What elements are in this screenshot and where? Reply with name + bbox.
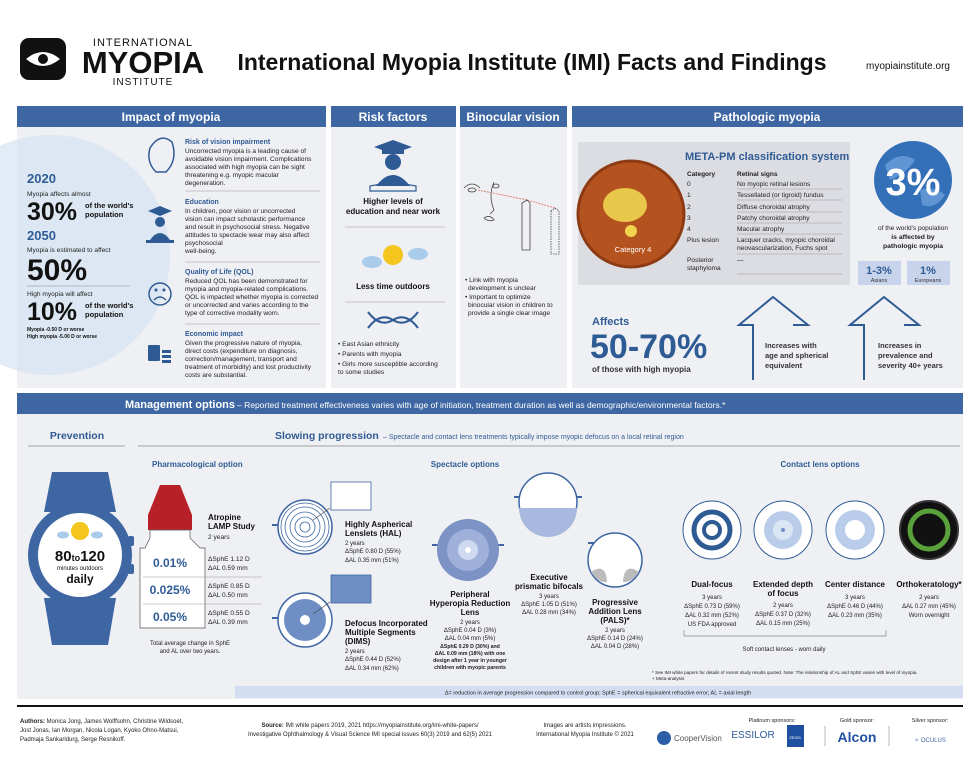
pharmacological heading: Pharmacological option [152,460,243,469]
atropine text [150,513,256,655]
lens: executive bifocals: ΔAL 0.28 mm (34%) [522,610,576,616]
footnote: * See IMI white papers for details of recent study results quoted. Note: The relationship of AL and SphE varies with level of myopia. [652,670,918,675]
META-PM table: META-PM classification system [685,151,849,163]
stat boxes: 1% [920,265,936,277]
footer: source [248,723,493,738]
item: quality of life: type of corrective modality worn. [185,310,280,317]
statistics: Myopia affects almost [27,191,91,198]
lens: HAL: ΔSphE 0.80 D (55%) [345,549,401,555]
icon: head [149,138,174,172]
logo: INTERNATIONAL [93,37,193,49]
management options bar [17,393,963,414]
footer: images note: International Myopia Institute © 2021 [536,731,635,738]
icon: graduate reading [370,140,416,191]
atropine text: Atropine [208,513,241,522]
lens: executive bifocals: prismatic bifocals [515,582,584,591]
statistics: 30% [27,198,77,226]
statistics: of the world's [85,201,133,210]
META-PM table: Tessellated (or tigroid) fundus [737,192,824,199]
binocular notes: provide a single clear image [468,310,550,317]
atropine text: 2 years [208,534,230,541]
META-PM table: — [737,257,744,264]
sponsors: CooperVision [674,734,722,743]
contact lens: orthokeratology: ΔAL 0.27 mm (45%) [902,604,956,610]
icon: atropine bottle [140,485,262,628]
globe 3%: of the world's population [878,225,948,232]
panel: risk factors: education and near work [346,207,441,216]
arrow: increases with age [739,297,828,380]
globe 3%: is affected by [891,234,935,241]
item: risk of vision impairment: Risk of vision impairment [185,139,271,146]
prevention heading: Prevention [50,430,104,442]
icon: calculator and coins [148,345,171,363]
arrow: increases with age: Increases with [765,341,817,350]
atropine text: LAMP Study [208,522,256,531]
management options bar: – Reported treatment effectiveness varies with age of initiation, treatment duration as well as demographic/environmental factors.* [237,400,726,410]
footer: images note: Images are artists impressions. [543,723,627,729]
footer: images note [536,723,635,738]
lens: PALS: (PALS)* [600,616,630,625]
sponsors: Platinum sponsors: [749,718,796,724]
atropine text: ΔAL 0.50 mm [208,592,248,599]
icon: watch: daily [66,572,94,586]
panel: impact of myopia [0,106,326,388]
atropine text: and AL over two years. [160,649,221,655]
fundus image: Category 4 [615,245,651,254]
icon: atropine bottle: 0.05% [153,610,187,624]
statistics: Myopia -0.50 D or worse [27,327,84,333]
META-PM table: 0 [687,181,691,188]
META-PM table: 1 [687,192,691,199]
lens: peripheral hyperopia reduction [430,519,510,671]
lens: peripheral hyperopia reduction: 2 years [460,620,480,626]
title: International Myopia Institute (IMI) Facts and Findings [237,49,827,75]
definitions bar: Δ= reduction in average progression compared to control group; SphE = spherical equivalent refractive error; AL = axial length [445,690,751,696]
META-PM table: Posterior [687,257,714,264]
risk: outdoors: Less time outdoors [356,282,430,291]
statistics: High myopia will affect [27,291,93,298]
lens: DIMS: ΔSphE 0.44 D (52%) [345,657,401,663]
icon: graduate [146,206,174,243]
statistics: 2020 [27,171,56,186]
lens: executive bifocals: ΔSphE 1.05 D (51%) [521,602,577,608]
contact lens: extended depth of focus: Extended depth [753,580,813,589]
slowing progression heading: – Spectacle and contact lens treatments typically impose myopic defocus on a local retinal region [383,434,684,441]
contact lens: dual-focus: 3 years [702,595,722,601]
lens: PALS: ΔSphE 0.14 D (24%) [587,636,643,642]
contact lens: orthokeratology: Worn overnight [909,613,950,619]
lens: PALS: Progressive [592,598,638,607]
footer: authors [20,719,184,743]
lens: HAL: Highly Aspherical [345,520,412,529]
icon: DNA [368,312,418,328]
panel: pathologic myopia [572,106,963,388]
footer: source: Source: IMI white papers 2019, 2021 https://myopiainstitute.org/imi-white-papers/ [261,723,479,729]
statistics: population [85,310,124,319]
contact lens: dual-focus: US FDA approved [688,622,736,628]
item: risk of vision impairment: associated with high myopia can be sight [185,164,305,171]
contact lens: dual-focus [683,501,741,628]
arrow: increases after 40: severity 40+ years [878,361,943,370]
atropine text: ΔAL 0.59 mm [208,565,248,572]
statistics: High myopia -5.00 D or worse [27,334,97,340]
binocular notes [465,277,553,317]
item: risk of vision impairment: avoidable vision impairment. Complications [185,156,312,163]
item: risk of vision impairment [185,139,312,187]
logo: MYOPIA [82,45,204,80]
lens: DIMS [272,575,428,672]
fundus image [578,161,684,267]
META-PM table: Lacquer cracks, myopic choroidal [737,237,835,244]
icon: sad face [149,283,171,305]
icon: atropine bottle: 0.025% [150,583,191,597]
META-PM table: 4 [687,226,691,233]
item: education: psychosocial [185,240,223,247]
icon: atropine bottle: 0.01% [153,556,187,570]
lens: peripheral hyperopia reduction: ΔAL 0.09 mm (18%) with one [435,651,505,657]
icon: watch [28,472,134,645]
lens: executive bifocals: Executive [530,573,568,582]
globe 3% [874,141,952,250]
contact lens heading: Contact lens options [780,460,860,469]
statistics [27,171,133,340]
lens: DIMS: Defocus Incorporated [345,619,428,628]
META-PM table [685,151,849,274]
logo [20,37,204,88]
META-PM table: Diffuse choroidal atrophy [737,204,811,211]
item: quality of life: or uncorrected and varies according to the [185,302,309,309]
item: quality of life: Quality of Life (QOL) [185,269,253,276]
lens: peripheral hyperopia reduction: Lens [461,608,480,617]
META-PM table: Category [687,171,716,178]
icon: watch: 80to120 [55,548,105,565]
atropine text: ΔAL 0.39 mm [208,619,248,626]
item: economic impact: direct costs (expenditure on diagnosis, [185,348,298,355]
item: quality of life: myopia and myopia-related complications. [185,286,308,293]
binocular notes: • Important to optimize [465,294,531,301]
META-PM table: No myopic retinal lesions [737,181,811,188]
atropine text: ΔSphE 0.55 D [208,610,250,617]
contact lens: extended depth of focus [753,501,813,627]
contact lens: orthokeratology: 2 years [919,595,939,601]
lens: HAL: Lenslets (HAL) [345,529,402,538]
icon: face with pencils [464,182,559,254]
item: quality of life: Reduced QOL has been demonstrated for [185,278,308,285]
sponsors: ESSILOR [731,730,775,741]
sponsors: Alcon [838,729,876,745]
lens: PALS: Addition Lens [588,607,642,616]
item: quality of life: QOL is impacted whether myopia is corrected [185,294,318,301]
affects 50-70%: Affects [592,316,629,328]
contact lens: dual-focus: Dual-focus [691,580,733,589]
panel: risk factors: Risk factors [359,110,428,124]
binocular notes: development is unclear [468,285,537,292]
stat boxes: Asians [871,278,888,284]
website: myopiainstitute.org [866,61,950,72]
risk: genetics [338,341,438,376]
META-PM table: Retinal signs [737,171,778,178]
META-PM table: Macular atrophy [737,226,785,233]
lens: peripheral hyperopia reduction: design after 1 year in younger [433,658,507,664]
lens: DIMS: 2 years [345,649,365,655]
footer: authors: Jost Jonas, Ian Morgan, Nicola Logan, Kyoko Ohno-Matsui, [20,728,179,734]
item: risk of vision impairment: degeneration. [185,180,225,187]
risk: genetics: • Parents with myopia [338,351,402,358]
affects 50-70%: of those with high myopia [592,365,691,374]
lens: HAL [272,482,412,564]
contact lens: center distance: 3 years [845,595,865,601]
contact lens: orthokeratology [896,501,963,619]
lens: peripheral hyperopia reduction: ΔAL 0.04 mm (5%) [445,636,495,642]
logo: INSTITUTE [113,77,173,88]
META-PM table: Patchy choroidal atrophy [737,215,810,222]
sponsors: ✧ OCULUS [914,737,946,744]
risk: genetics: to some studies [338,369,385,376]
panel: risk factors [331,106,456,388]
icon: sun and clouds [362,245,428,268]
statistics: population [85,210,124,219]
lens: PALS [587,533,643,650]
lens: executive bifocals [514,473,584,616]
lens: DIMS: (DIMS) [345,637,371,646]
atropine text: ΔSphE 1.12 D [208,556,250,563]
risk: genetics: • Girls more susceptible according [338,361,438,368]
lens: PALS: 2 years [605,628,625,634]
item: risk of vision impairment: Uncorrected myopia is a leading cause of [185,148,306,155]
statistics: Myopia is estimated to affect [27,247,111,254]
lens: peripheral hyperopia reduction: Hyperopia Reduction [430,599,510,608]
item: education [184,199,310,255]
contact lens: dual-focus: ΔAL 0.32 mm (52%) [685,613,739,619]
META-PM table: 2 [687,204,691,211]
arrow: increases after 40: Increases in [878,341,922,350]
globe 3%: pathologic myopia [883,243,943,250]
panel: impact of myopia: Impact of myopia [122,110,221,124]
item: economic impact: Given the progressive nature of myopia, [185,340,302,347]
lens: DIMS: ΔAL 0.34 mm (62%) [345,666,399,672]
panel: pathologic myopia: Pathologic myopia [714,110,821,124]
lens: peripheral hyperopia reduction: children with myopic parents [434,665,506,671]
binocular notes: binocular vision in children to [468,302,553,309]
lens: PALS: ΔAL 0.04 D (28%) [591,644,639,650]
affects 50-70% [590,316,707,374]
panel: management body [17,414,963,699]
contact lens: extended depth of focus: 2 years [773,603,793,609]
sponsors: Gold sponsor: [840,718,875,724]
item: education: In children, poor vision or uncorrected [185,208,296,215]
footnote: + Meta-analysis [652,676,685,681]
META-PM table: 3 [687,215,691,222]
lens: HAL: ΔAL 0.35 mm (51%) [345,558,399,564]
panel: binocular vision [460,106,567,388]
arrow: increases after 40 [850,297,943,380]
sponsors: ZEISS [789,735,801,740]
footer: authors: Padmaja Sankaridurg, Serge Resnikoff. [20,737,126,743]
slowing progression heading: Slowing progression [275,430,379,442]
footer: source: Investigative Ophthalmology & Visual Science IMI special issues 60(3) 2019 and 62(5) 2021 [248,732,493,738]
definitions bar [235,686,963,698]
sponsors [657,718,949,747]
statistics: of the world's [85,301,133,310]
item: economic impact: treatment of morbidity) and lost productivity [185,364,312,371]
binocular notes: • Link with myopia [465,277,518,284]
soft lens bracket: Soft contact lenses - worn daily [742,647,826,653]
stat boxes: Europeans [915,278,942,284]
panel: binocular vision: Binocular vision [466,110,560,124]
statistics: 10% [27,298,77,326]
item: risk of vision impairment: threatening e.g. myopic macular [185,172,280,179]
sponsors: Silver sponsor: [912,718,949,724]
contact lens: dual-focus: ΔSphE 0.73 D (59%) [684,604,740,610]
risk: education: Higher levels of [363,197,423,206]
item: economic impact: Economic impact [185,331,244,338]
META-PM table: Plus lesion [687,237,719,244]
globe 3%: 3% [886,162,940,204]
spectacle heading: Spectacle options [431,460,500,469]
item: education: well-being. [184,248,217,255]
item: education: attitudes to spectacle wear may also affect [185,232,309,239]
affects 50-70%: 50-70% [590,328,707,366]
risk: genetics: • East Asian ethnicity [338,341,400,348]
management options bar: Management options [125,399,235,411]
item: economic impact: costs are substantial. [185,372,247,379]
META-PM table: neovascularization, Fuchs spot [737,245,828,252]
statistics: 2050 [27,228,56,243]
lens: DIMS: Multiple Segments [345,628,416,637]
contact lens: center distance: Center distance [825,580,886,589]
item: education: and result in psychosocial stress. Negative [185,224,310,231]
lens: peripheral hyperopia reduction: Peripheral [450,590,490,599]
soft lens bracket [684,630,886,653]
lens: peripheral hyperopia reduction: ΔSphE 0.29 D (30%) and [440,644,500,650]
contact lens: extended depth of focus: ΔSphE 0.37 D (32%) [755,612,811,618]
stat boxes [858,261,950,285]
item: economic impact [185,331,312,379]
lens: peripheral hyperopia reduction: ΔSphE 0.04 D (3%) [444,628,496,634]
arrow: increases with age: age and spherical [765,351,828,360]
item: education: Education [185,199,219,206]
stat boxes: 1-3% [866,265,892,277]
contact lens: center distance: ΔSphE 0.46 D (44%) [827,604,883,610]
footnote [652,670,918,681]
slowing progression heading [275,430,684,442]
icon: watch: minutes outdoors [57,566,103,572]
lens: executive bifocals: 3 years [539,594,559,600]
contact lens: center distance [825,501,886,619]
footer: authors: Authors: Monica Jong, James Wolffsohn, Christine Wildsoet, [20,719,184,725]
contact lens: extended depth of focus: ΔAL 0.15 mm (25%) [756,621,810,627]
atropine text: ΔSphE 0.85 D [208,583,250,590]
globe background [0,135,170,375]
item: economic impact: correction/management, transport and [185,356,297,363]
contact lens: orthokeratology: Orthokeratology* [896,580,963,589]
contact lens: center distance: ΔAL 0.23 mm (35%) [828,613,882,619]
lens: HAL: 2 years [345,541,365,547]
item: education: vision can impact scholastic performance [185,216,306,223]
contact lens: extended depth of focus: of focus [767,589,799,598]
statistics: 50% [27,254,87,287]
arrow: increases with age: equivalent [765,361,803,370]
arrow: increases after 40: prevalence and [878,351,933,360]
atropine text: Total average change in SphE [150,641,230,647]
item: quality of life [185,269,318,317]
META-PM table: staphyloma [687,265,721,272]
